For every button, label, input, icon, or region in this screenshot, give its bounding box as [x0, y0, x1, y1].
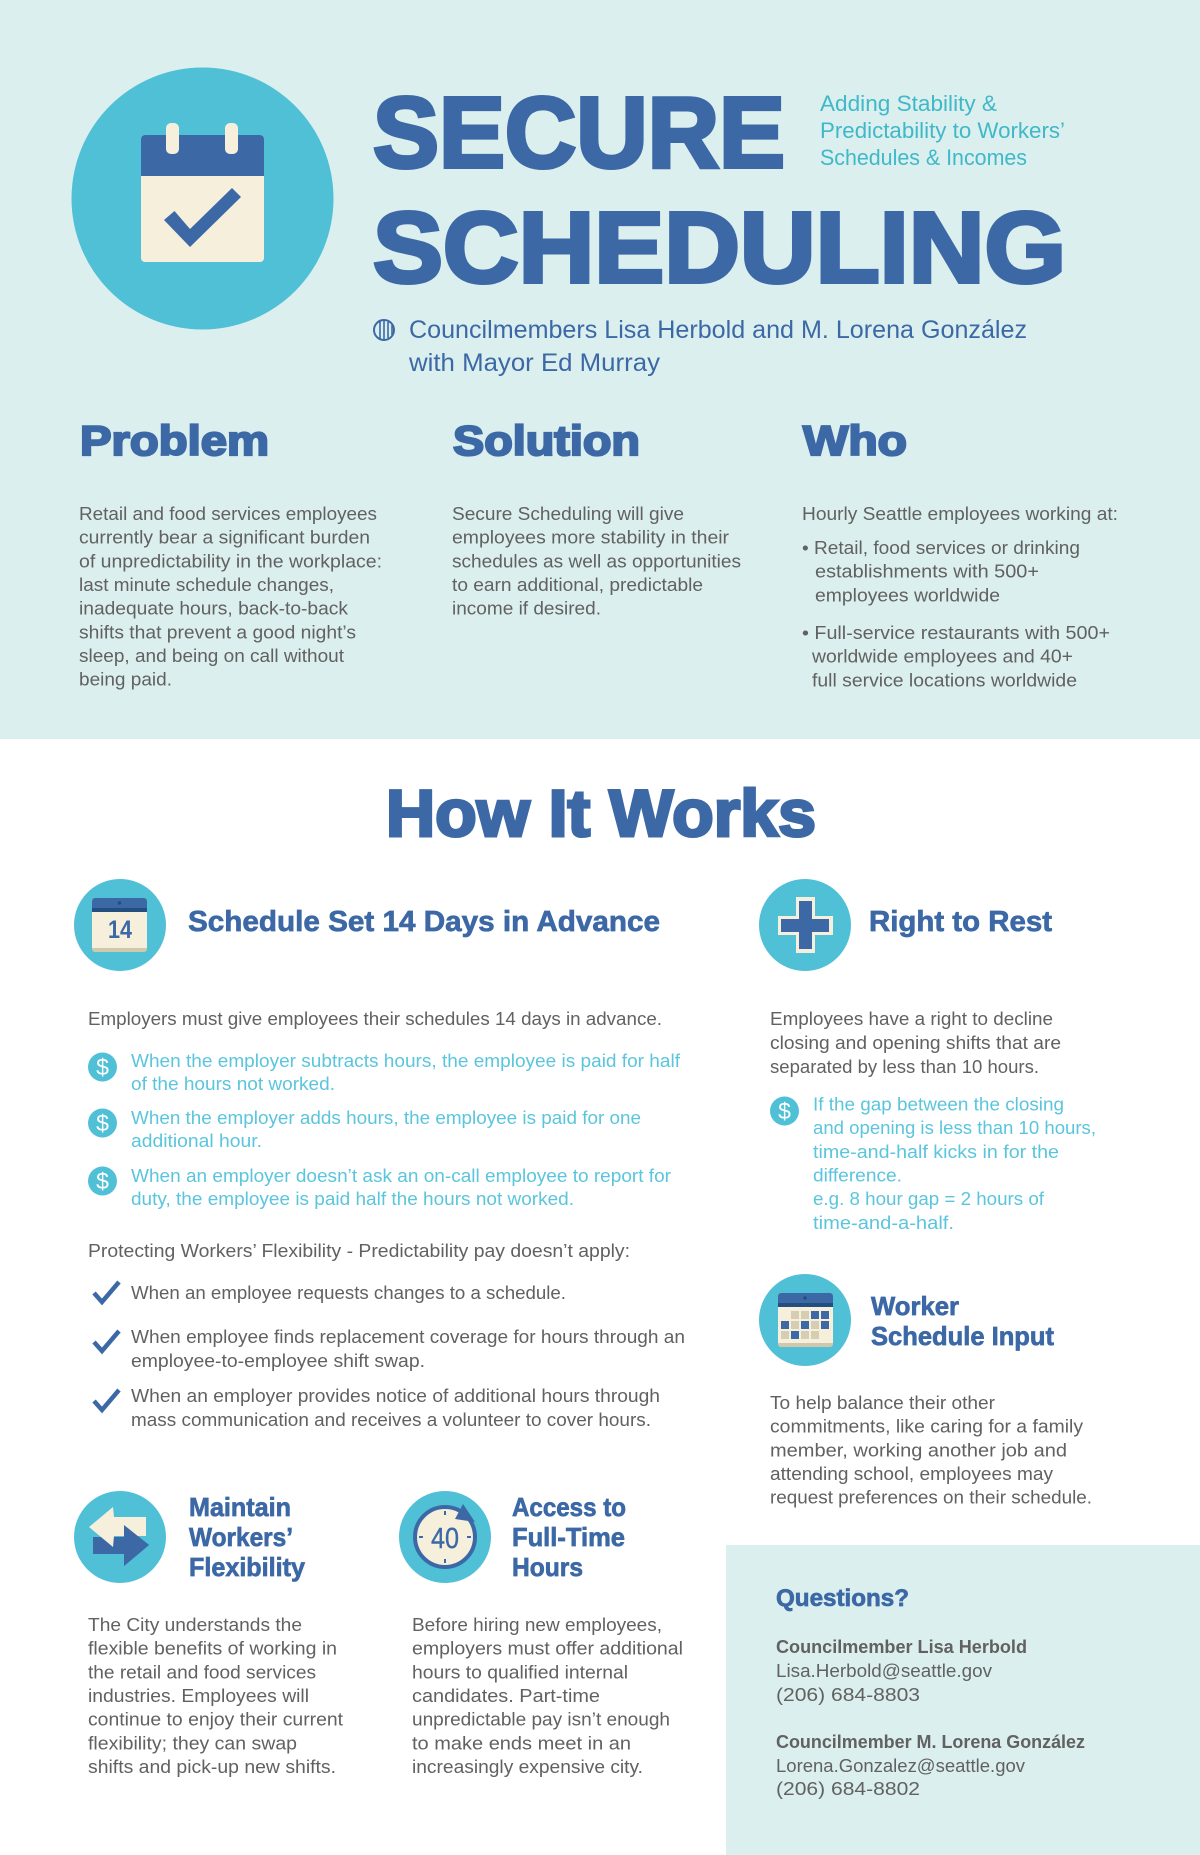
icon: check 1 [94, 1282, 119, 1302]
icon: dollar 3: $ [96, 1168, 109, 1194]
text: adds hours: additional hour. [131, 1131, 262, 1151]
text: access to hours: increasingly expensive city. [412, 1757, 643, 1777]
heading: Right to Rest: Right to Rest [869, 906, 1052, 938]
heading: Access to Full-Time Hours [512, 1492, 626, 1582]
text: schedule intro: Employers must give employees their schedules 14 days in advance. [88, 1009, 662, 1029]
title: Secure Scheduling: SECURE [373, 77, 785, 189]
heading: questions: Questions? [776, 1585, 909, 1612]
text: worker input [770, 1393, 1092, 1508]
heading: Maintain Workers' Flexibility: Flexibility [189, 1552, 306, 1582]
icon: clock 40: 40 [431, 1523, 459, 1555]
text: solution description: schedules as well as opportunities [452, 551, 741, 571]
heading: Access to Full-Time Hours: Access to [512, 1492, 626, 1522]
text: on-call: duty, the employee is paid half the hours not worked. [131, 1189, 574, 1209]
icon: calendar 14 [74, 879, 166, 971]
icon: dollar 1 [88, 1052, 117, 1082]
text: solution description: income if desired. [452, 599, 601, 619]
icon: dollar 2 [88, 1108, 117, 1138]
text: time-and-half: time-and-half kicks in for the [813, 1142, 1059, 1162]
panel: questions [726, 1545, 1200, 1855]
text: problem description: last minute schedule changes, [79, 575, 334, 595]
tagline: Predictability to Workers’ [820, 118, 1065, 143]
text: mass communication [131, 1386, 660, 1430]
text: time-and-half [813, 1094, 1096, 1233]
text: mass communication: mass communication and receives a volunteer to cover hours. [131, 1410, 651, 1430]
heading: Schedule Set 14 Days in Advance: Schedule Set 14 Days in Advance [188, 906, 660, 938]
text: problem description [79, 504, 382, 690]
text: who is covered: employees worldwide [815, 585, 1000, 605]
contact: Lorena González: Lorena.Gonzalez@seattle.gov [776, 1756, 1025, 1776]
text: problem description: inadequate hours, back-to-back [79, 599, 349, 619]
text: maintain flexibility: The City understands the [88, 1615, 302, 1635]
text: maintain flexibility: shifts and pick-up new shifts. [88, 1757, 336, 1777]
heading: Worker Schedule Input: Worker [871, 1291, 959, 1321]
text: access to hours: hours to qualified internal [412, 1662, 628, 1682]
text: who is covered [802, 504, 1118, 690]
icon: check 3 [94, 1390, 119, 1410]
contact: Lisa Herbold [776, 1637, 1027, 1705]
icon: calendar with check mark [72, 68, 334, 330]
heading: Problem: Problem [80, 417, 269, 464]
text: maintain flexibility: flexibility; they can swap [88, 1733, 297, 1753]
title: Secure Scheduling: SCHEDULING [373, 192, 1066, 304]
text: subtracts hours: When the employer subtracts hours, the employee is paid for half [131, 1051, 681, 1071]
text: shift swap [131, 1327, 685, 1371]
text: requests changes: When an employee requests changes to a schedule. [131, 1283, 566, 1303]
text: right to rest: Employees have a right to decline [770, 1009, 1053, 1029]
text: problem description: shifts that prevent a good night’s [79, 622, 356, 642]
header panel background [0, 0, 1200, 739]
text: access to hours: to make ends meet in an [412, 1733, 631, 1753]
tagline: Adding Stability & [820, 91, 997, 116]
icon: city of Seattle logo [374, 320, 394, 340]
text: maintain flexibility [88, 1615, 343, 1777]
text: maintain flexibility: the retail and food services [88, 1662, 316, 1682]
icon: dollar 4: $ [778, 1098, 791, 1124]
icon: dollar 1: $ [96, 1054, 109, 1080]
sponsors: with Mayor Ed Murray [408, 349, 661, 377]
text: maintain flexibility: continue to enjoy their current [88, 1710, 343, 1730]
icon: plus [759, 879, 851, 971]
icon: swap arrows [74, 1491, 166, 1583]
heading: Maintain Workers' Flexibility: Workers’ [189, 1522, 293, 1552]
title: Secure Scheduling [373, 77, 1066, 304]
icon: check 2 [94, 1331, 119, 1351]
icon: dollar 2: $ [96, 1110, 109, 1136]
text: time-and-half: time-and-a-half. [813, 1213, 954, 1233]
text: solution description: Secure Scheduling will give [452, 504, 684, 524]
text: shift swap: employee-to-employee shift swap. [131, 1351, 425, 1371]
heading: Solution: Solution [453, 417, 640, 464]
text: solution description [452, 504, 741, 619]
text: adds hours: When the employer adds hours, the employee is paid for one [131, 1108, 641, 1128]
text: right to rest: separated by less than 10 hours. [770, 1057, 1039, 1077]
text: access to hours [412, 1615, 683, 1777]
contact: Lorena González [776, 1732, 1085, 1799]
text: worker input: request preferences on their schedule. [770, 1488, 1092, 1508]
text: access to hours: Before hiring new employees, [412, 1615, 662, 1635]
heading: Worker Schedule Input [871, 1291, 1054, 1351]
text: shift swap: When employee finds replacement coverage for hours through an [131, 1327, 685, 1347]
heading: Who: Who [803, 417, 907, 464]
text: flexibility intro: Protecting Workers’ Flexibility - Predictability pay doesn’t apply: [88, 1241, 630, 1261]
text: problem description: being paid. [79, 670, 172, 690]
text: right to rest: closing and opening shifts that are [770, 1033, 1061, 1053]
text: who is covered: worldwide employees and 40+ [811, 647, 1073, 667]
heading: Access to Full-Time Hours: Full-Time [512, 1522, 625, 1552]
icon: schedule grid calendar [759, 1274, 851, 1366]
heading: Access to Full-Time Hours: Hours [512, 1552, 583, 1582]
text: problem description: sleep, and being on call without [79, 646, 344, 666]
text: who is covered: full service locations worldwide [812, 670, 1077, 690]
text: maintain flexibility: flexible benefits of working in [88, 1639, 337, 1659]
tagline: Schedules & Incomes [820, 145, 1027, 170]
icon: calendar 14: 14 [108, 916, 132, 944]
contact: Lisa Herbold: (206) 684-8803 [776, 1685, 920, 1705]
text: worker input: commitments, like caring for a family [770, 1417, 1083, 1437]
text: on-call [131, 1166, 671, 1209]
text: time-and-half: and opening is less than 10 hours, [813, 1118, 1096, 1138]
text: who is covered: • Full-service restaurants with 500+ [802, 623, 1110, 643]
text: time-and-half: difference. [813, 1166, 902, 1186]
text: mass communication: When an employer provides notice of additional hours through [131, 1386, 660, 1406]
heading: Worker Schedule Input: Schedule Input [871, 1321, 1054, 1351]
text: right to rest [770, 1009, 1061, 1077]
text: subtracts hours: of the hours not worked. [131, 1074, 335, 1094]
text: access to hours: employers must offer additional [412, 1639, 683, 1659]
text: worker input: To help balance their other [770, 1393, 995, 1413]
sponsors [408, 316, 1027, 377]
text: worker input: attending school, employees may [770, 1464, 1053, 1484]
contact: Lisa Herbold: Lisa.Herbold@seattle.gov [776, 1661, 992, 1681]
text: on-call: When an employer doesn’t ask an on-call employee to report for [131, 1166, 671, 1186]
icon: clock 40 [399, 1491, 491, 1583]
heading: Maintain Workers' Flexibility: Maintain [189, 1492, 291, 1522]
text: problem description: currently bear a significant burden [79, 528, 370, 548]
text: solution description: employees more stability in their [452, 528, 729, 548]
contact: Lorena González: Councilmember M. Lorena González [776, 1732, 1085, 1752]
heading: Maintain Workers' Flexibility [189, 1492, 306, 1582]
tagline [820, 91, 1065, 170]
icon: dollar 4 [770, 1096, 799, 1126]
contact: Lorena González: (206) 684-8802 [776, 1779, 920, 1799]
text: time-and-half: If the gap between the closing [813, 1094, 1064, 1114]
text: who is covered: Hourly Seattle employees working at: [802, 504, 1118, 524]
icon: dollar 3 [88, 1166, 117, 1196]
text: solution description: to earn additional, predictable [452, 575, 703, 595]
text: who is covered: establishments with 500+ [815, 562, 1039, 582]
text: maintain flexibility: industries. Employees will [88, 1686, 309, 1706]
text: adds hours [131, 1108, 641, 1151]
text: subtracts hours [131, 1051, 681, 1094]
text: access to hours: candidates. Part-time [412, 1686, 600, 1706]
heading: How It Works: How It Works [386, 776, 816, 850]
text: access to hours: unpredictable pay isn’t enough [412, 1710, 670, 1730]
text: problem description: Retail and food services employees [79, 504, 377, 524]
contact: Lisa Herbold: Councilmember Lisa Herbold [776, 1637, 1027, 1657]
sponsors: Councilmembers Lisa Herbold and M. Lorena González [409, 316, 1027, 344]
text: who is covered: • Retail, food services or drinking [802, 538, 1080, 558]
text: worker input: member, working another job and [770, 1440, 1067, 1460]
text: problem description: of unpredictability in the workplace: [79, 551, 382, 571]
text: time-and-half: e.g. 8 hour gap = 2 hours of [813, 1189, 1045, 1209]
